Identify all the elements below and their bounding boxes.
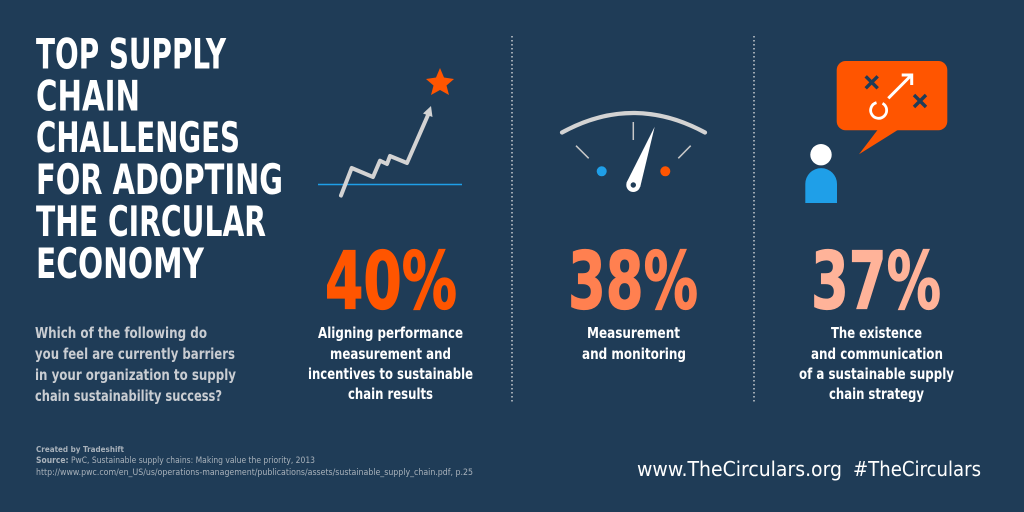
description: 37% [799, 325, 954, 403]
source credits [36, 445, 473, 478]
title: CHAIN [36, 72, 140, 120]
website and hashtag [637, 457, 981, 481]
description: 37%: and communication [811, 346, 943, 363]
source credits: http://www.pwc.com/en_US/us/operations-management/publications/assets/sustainable_supply_chain.pdf, p.25 [36, 468, 473, 478]
survey question: you feel are currently barriers [35, 346, 235, 363]
statistic: 40%: 40% [325, 236, 457, 328]
statistic: 38%: 38% [568, 236, 698, 328]
title: THE CIRCULAR [36, 197, 266, 246]
description: 40% [308, 325, 473, 403]
source credits: Created by Tradeshift [36, 445, 124, 454]
title: CHALLENGES [36, 113, 240, 162]
description: 38% [582, 325, 686, 363]
title: ECONOMY [36, 239, 205, 288]
title: FOR ADOPTING [36, 155, 283, 204]
survey question: chain sustainability success? [35, 388, 222, 405]
description: 40%: Aligning performance [318, 325, 463, 342]
panel: 40% performance measurement [308, 68, 473, 403]
icon: person with strategy speech bubble [805, 61, 947, 203]
statistic: 37%: 37% [811, 236, 941, 328]
website and hashtag: #TheCirculars [853, 457, 981, 481]
description: 40%: chain results [348, 386, 433, 403]
title [36, 30, 283, 288]
icon: rising chart with star [318, 68, 462, 196]
survey question [35, 325, 236, 405]
description: 37%: The existence [831, 325, 922, 342]
title: TOP SUPPLY [36, 30, 227, 78]
description: 40%: incentives to sustainable [308, 366, 473, 383]
panel: 38% measurement and monitoring [562, 113, 705, 363]
description: 37%: chain strategy [829, 386, 924, 403]
website and hashtag: www.TheCirculars.org [637, 457, 842, 481]
source credits: Source: PwC, Sustainable supply chains: Making value the priority, 2013 [36, 456, 315, 466]
description: 38%: and monitoring [582, 346, 686, 363]
description: 38%: Measurement [587, 325, 680, 342]
description: 40%: measurement and [330, 346, 451, 363]
survey question: in your organization to supply [35, 367, 236, 384]
icon: gauge [562, 113, 705, 192]
survey question: Which of the following do [35, 325, 207, 342]
description: 37%: of a sustainable supply [799, 366, 954, 383]
panel: 37% sustainable supply chain strategy [799, 61, 954, 403]
